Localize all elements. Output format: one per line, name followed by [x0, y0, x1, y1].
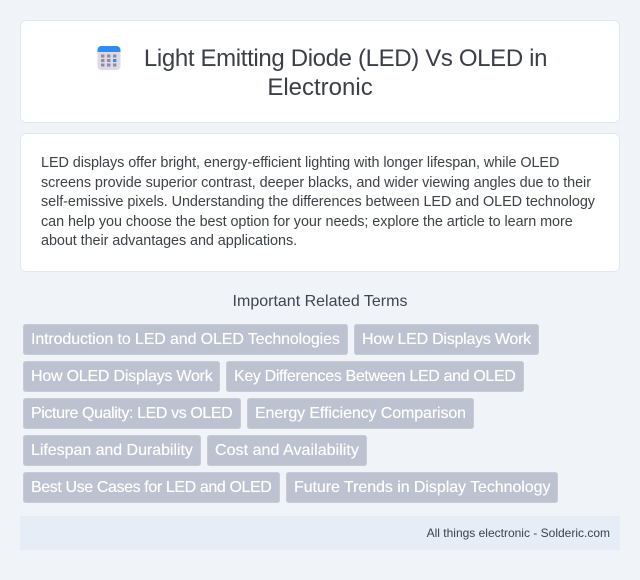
title: Electronic — [267, 74, 373, 101]
tag — [23, 472, 280, 503]
tag — [247, 398, 474, 429]
header panel — [20, 20, 620, 123]
icon: calendar — [98, 46, 120, 70]
tag — [23, 398, 241, 429]
tag — [23, 324, 348, 355]
tag — [23, 361, 220, 392]
description panel — [20, 133, 620, 272]
description text: LED displays offer bright, energy-efficient lighting with longer lifespan, while OLED — [41, 155, 559, 171]
tag — [286, 472, 558, 503]
tag group: related terms — [23, 324, 558, 503]
tag: How LED Displays Work — [362, 331, 531, 348]
title — [144, 45, 547, 101]
tag: Introduction to LED and OLED Technologies — [31, 331, 340, 348]
tag: Best Use Cases for LED and OLED — [31, 479, 271, 496]
description text: screens provide superior contrast, deeper blacks, and wider viewing angles due to their — [41, 175, 591, 191]
description text: self-emissive pixels. Understanding the differences between LED and OLED technology — [41, 194, 595, 210]
footer credit: All things electronic - Solderic.com — [427, 526, 610, 540]
tag: Energy Efficiency Comparison — [255, 405, 466, 422]
tag: Lifespan and Durability — [31, 442, 193, 459]
tag — [207, 435, 367, 466]
description text: can help you choose the best option for your needs; explore the article to learn more — [41, 214, 573, 230]
footer bar — [20, 516, 620, 550]
tag — [226, 361, 524, 392]
tag: Picture Quality: LED vs OLED — [31, 405, 232, 422]
tag: How OLED Displays Work — [31, 368, 213, 385]
description text: about their advantages and applications. — [41, 233, 297, 249]
tag — [354, 324, 539, 355]
description text — [41, 155, 595, 249]
related terms heading: Important Related Terms — [233, 293, 407, 310]
tag: Future Trends in Display Technology — [294, 479, 550, 496]
title: Light Emitting Diode (LED) Vs OLED in — [144, 45, 547, 72]
tag — [23, 435, 201, 466]
tag: Cost and Availability — [215, 442, 359, 459]
tag: Key Differences Between LED and OLED — [234, 368, 516, 385]
